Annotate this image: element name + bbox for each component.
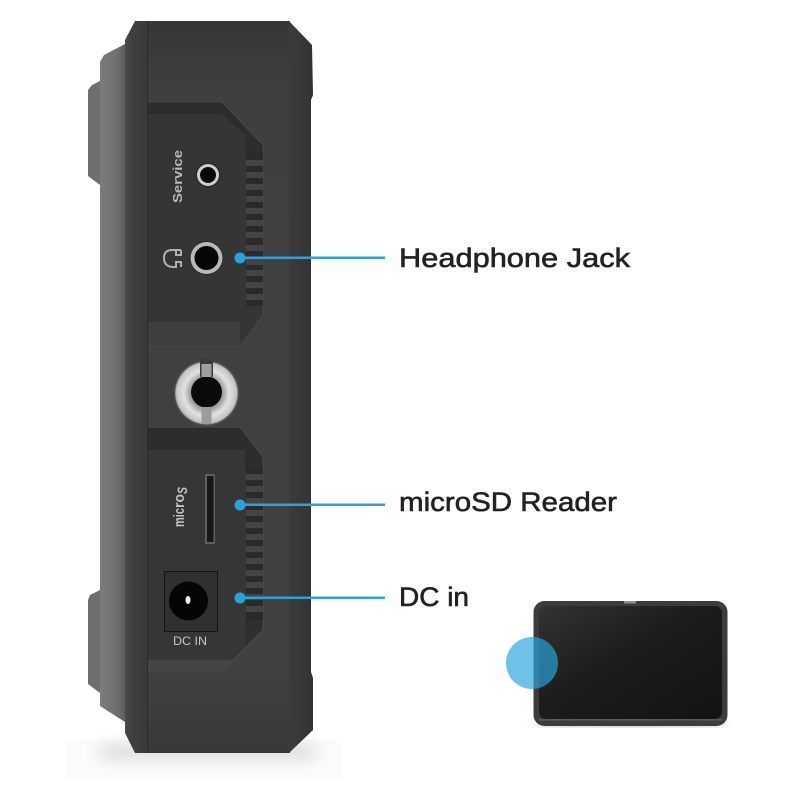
service label: Service [170, 150, 185, 203]
callout: microSD reader [234, 487, 617, 517]
microSD logo: S [174, 487, 190, 494]
front bezel band [125, 21, 148, 753]
callout: DC in: DC in [399, 582, 469, 612]
microSD logo: mic [171, 508, 188, 527]
mounting screw [174, 359, 240, 426]
microSD slot [205, 474, 215, 544]
callout: headphone jack: Headphone Jack [399, 243, 631, 273]
DC IN label: DC IN [173, 636, 207, 648]
monitor bottom lip [539, 719, 722, 720]
floor shadow [66, 740, 341, 779]
monitor frame [534, 601, 728, 726]
DC in socket [164, 572, 218, 632]
locator: small monitor front view [506, 601, 730, 728]
icon: headphones [164, 250, 181, 267]
service jack [196, 162, 220, 188]
cooling fins [246, 468, 263, 620]
right band [289, 21, 313, 753]
callout: microSD reader: microSD Reader [399, 487, 617, 517]
callout: headphone jack [234, 243, 631, 273]
headphone jack [190, 241, 224, 275]
monitor body side view [88, 21, 313, 753]
cooling fins [246, 153, 263, 306]
microSD logo [171, 487, 190, 527]
microSD logo: ro [171, 494, 188, 508]
upper port recess [148, 102, 263, 346]
main side panel [147, 21, 290, 753]
callout: DC in [234, 582, 469, 612]
lower port recess [148, 427, 263, 671]
back rear bumpers [88, 44, 125, 722]
highlight circle [506, 637, 558, 689]
monitor screen [539, 606, 722, 719]
seam between bezel and main [147, 21, 148, 753]
monitor top logo [624, 601, 636, 604]
